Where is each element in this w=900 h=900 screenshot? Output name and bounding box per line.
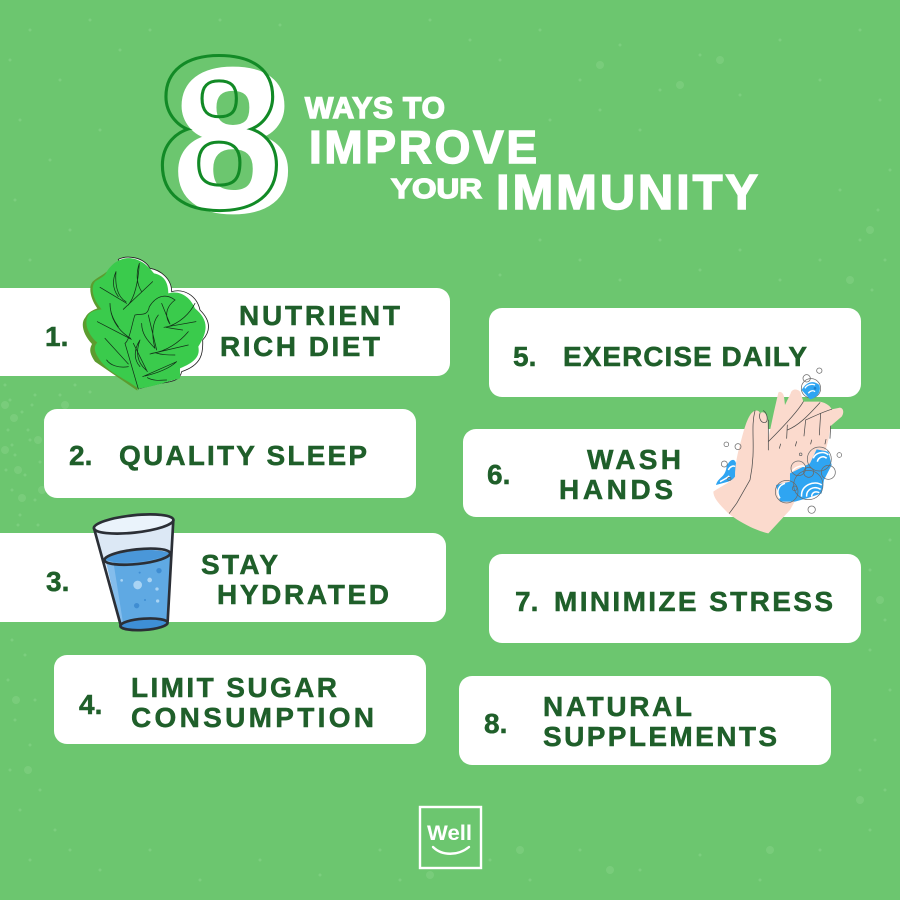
panel: item 7 minimize stress: MINIMIZE STRESS [554, 586, 833, 617]
panel: item 1 nutrient rich diet [0, 288, 450, 376]
panel: item 1 nutrient rich diet: RICH DIET [220, 331, 380, 362]
panel: item 1 nutrient rich diet: 1. [45, 321, 68, 352]
icon: washing hands with soap [713, 368, 843, 533]
panel: item 3 stay hydrated: STAY [201, 549, 278, 580]
panel: item 6 wash hands [463, 429, 900, 517]
panel: item 8 natural supplements: 8. [484, 708, 507, 739]
logo: Well [420, 807, 481, 868]
panel: item 4 limit sugar consumption: CONSUMPTION [131, 702, 374, 733]
heading: your: YOUR [391, 173, 482, 204]
panel: item 1 nutrient rich diet: NUTRIENT [239, 300, 400, 331]
panel: item 8 natural supplements: SUPPLEMENTS [543, 721, 777, 752]
numeral 8: 8 [174, 28, 292, 253]
panel: item 6 wash hands: HANDS [559, 474, 673, 505]
panel: item 6 wash hands: WASH [587, 444, 681, 475]
title [158, 14, 758, 253]
numeral 8 [160, 54, 288, 214]
icon: spinach leaves [83, 257, 209, 391]
panel: item 5 exercise daily: 5. [513, 341, 536, 372]
panel: item 3 stay hydrated: 3. [46, 566, 69, 597]
panel: item 8 natural supplements [459, 676, 831, 765]
heading: ways to: WAYS TO [305, 92, 445, 125]
heading: improve: IMPROVE [309, 121, 537, 173]
heading: immunity: IMMUNITY [496, 166, 758, 220]
logo: Well: Well [427, 822, 472, 845]
panel: item 4 limit sugar consumption: 4. [79, 689, 102, 720]
numeral 8: 8 [158, 14, 281, 251]
panel: item 8 natural supplements: NATURAL [543, 691, 692, 722]
panel: item 4 limit sugar consumption: LIMIT SUGAR [131, 672, 337, 703]
panel: item 5 exercise daily [489, 308, 861, 397]
panel: item 2 quality sleep: QUALITY SLEEP [119, 440, 367, 471]
panel: item 3 stay hydrated [0, 533, 446, 622]
panel: item 2 quality sleep: 2. [69, 440, 92, 471]
panel: item 7 minimize stress [489, 554, 861, 643]
panel: item 2 quality sleep [44, 409, 416, 498]
panel: item 5 exercise daily: EXERCISE DAILY [563, 341, 807, 372]
panel: item 6 wash hands: 6. [487, 459, 510, 490]
panel: item 7 minimize stress: 7. [515, 586, 538, 617]
icon: glass of water [93, 511, 174, 632]
panel: item 3 stay hydrated: HYDRATED [217, 579, 389, 610]
panel: item 4 limit sugar consumption [54, 655, 426, 744]
